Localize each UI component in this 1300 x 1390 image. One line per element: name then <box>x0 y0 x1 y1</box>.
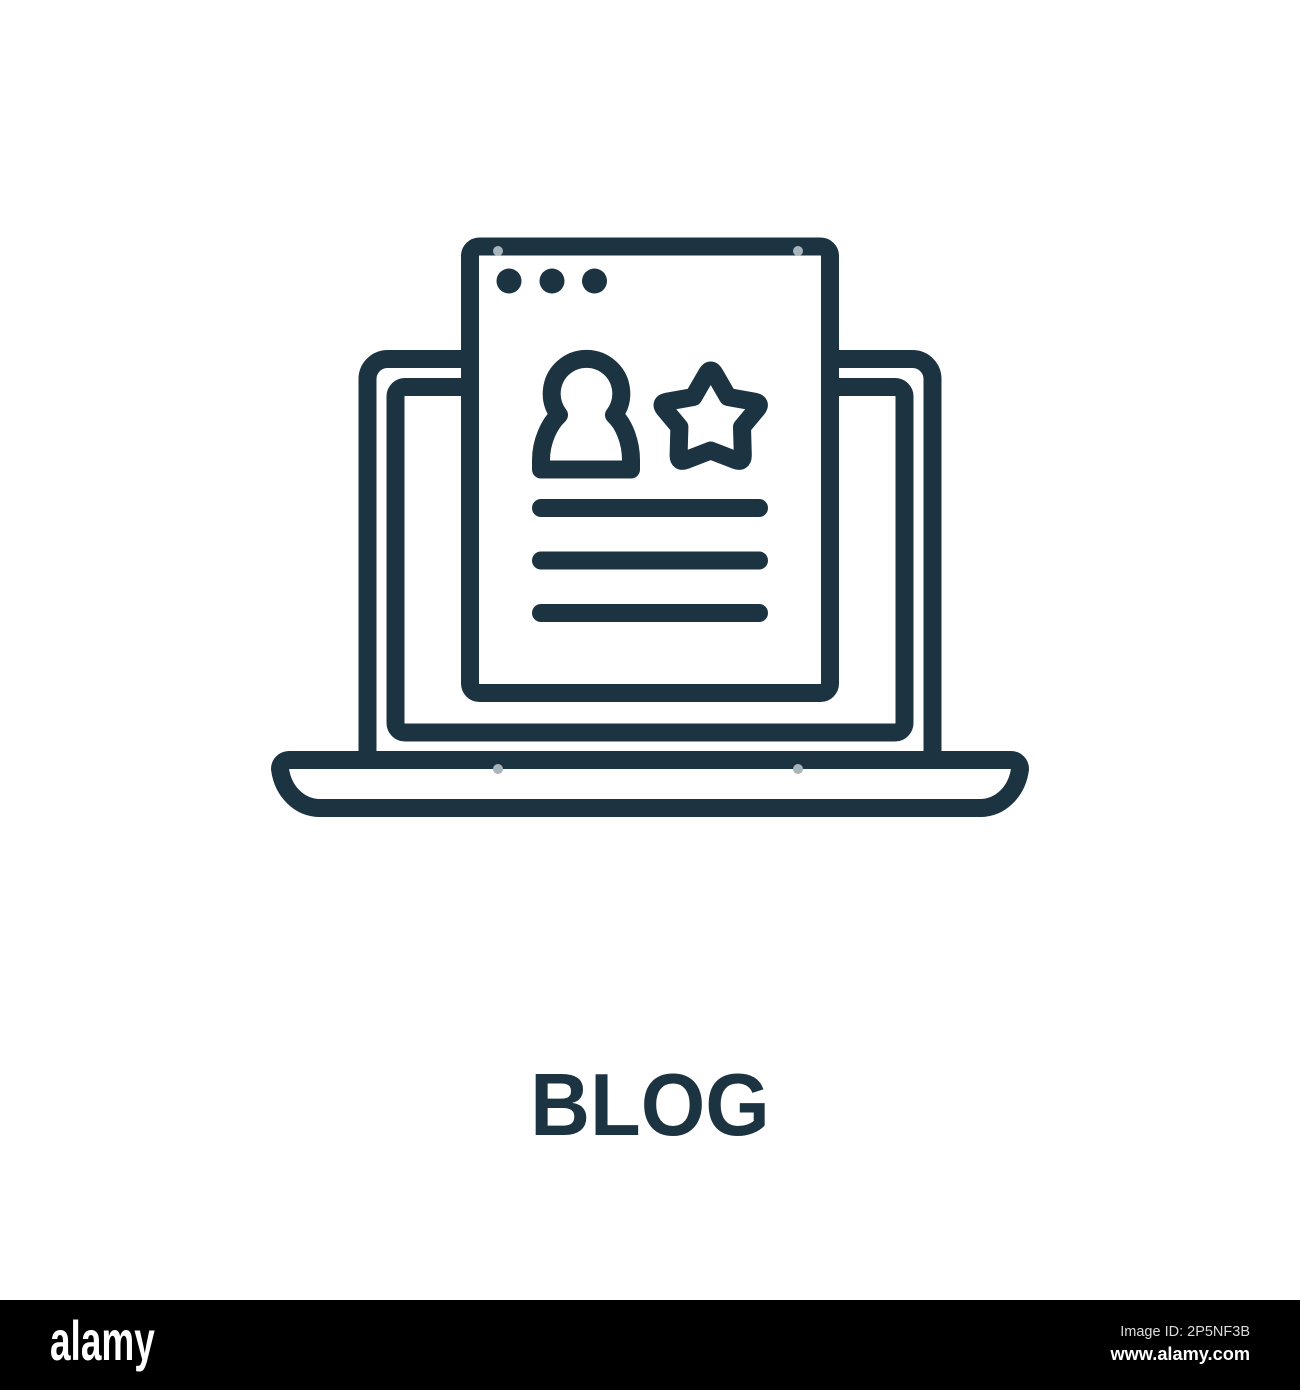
text lines <box>541 508 759 613</box>
image id: Image ID: 2P5NF3B <box>1120 1324 1250 1340</box>
watermark specks <box>493 246 803 774</box>
logo: alamy <box>50 1309 155 1372</box>
icon: person <box>541 359 631 470</box>
laptop screen outline <box>396 387 904 732</box>
icon: star <box>663 370 759 461</box>
laptop lid outline <box>368 359 933 760</box>
blog page <box>470 246 830 693</box>
website url: www.alamy.com <box>1110 1344 1250 1364</box>
footer bar <box>0 1300 1300 1390</box>
laptop base <box>280 760 1020 808</box>
window dots <box>496 268 607 294</box>
title: BLOG <box>530 1056 770 1154</box>
